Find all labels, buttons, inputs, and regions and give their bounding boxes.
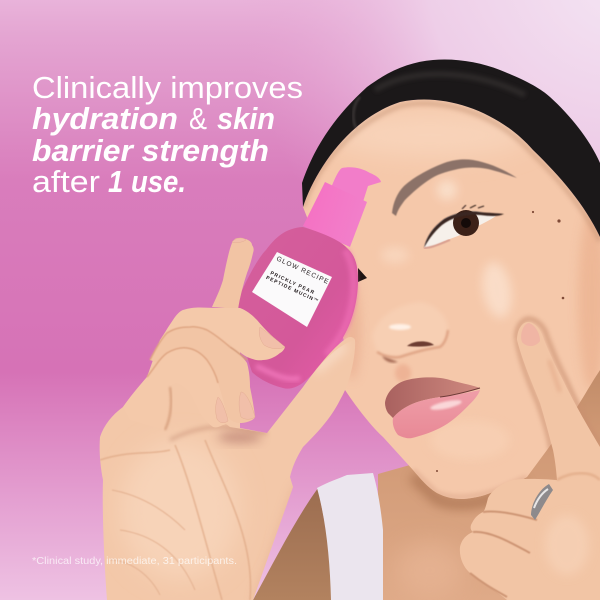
eyebrow [392,159,517,216]
moles [436,211,564,472]
product label [252,252,332,327]
headline [32,70,303,199]
headline: Clinically improves [32,70,303,105]
headline: after [32,164,100,199]
middle finger [150,327,255,423]
bottle: Prickly Pear Peptide Mucin [238,167,381,389]
headline: 1 use. [108,164,186,199]
fingernails [216,238,285,423]
eye [424,205,504,248]
white top strap [317,473,383,600]
face [303,99,600,499]
index finger [160,308,285,370]
hair [302,59,600,237]
headline: barrier strength [32,133,269,168]
bottle body [238,227,358,389]
palm and thumb [100,310,355,600]
pump [328,167,381,205]
footnote: *Clinical study, immediate, 31 participants. [32,556,237,567]
product label: PEPTIDE MUCIN™ [265,275,320,305]
far eye lashes behind bottle [358,268,367,282]
ring [531,484,553,520]
nose [372,302,448,382]
ring finger [123,348,228,430]
product label: PRICKLY PEAR [269,270,316,296]
pointing finger and lower hand [460,319,600,600]
headline: skin [217,101,275,136]
headline: & [189,101,207,136]
collar [303,182,367,247]
product label: GLOW RECIPE [275,255,330,286]
headline: hydration [32,101,178,136]
lips [385,377,480,438]
neck and chest [253,360,600,600]
hand holding bottle [100,238,355,600]
raised finger [212,238,254,309]
